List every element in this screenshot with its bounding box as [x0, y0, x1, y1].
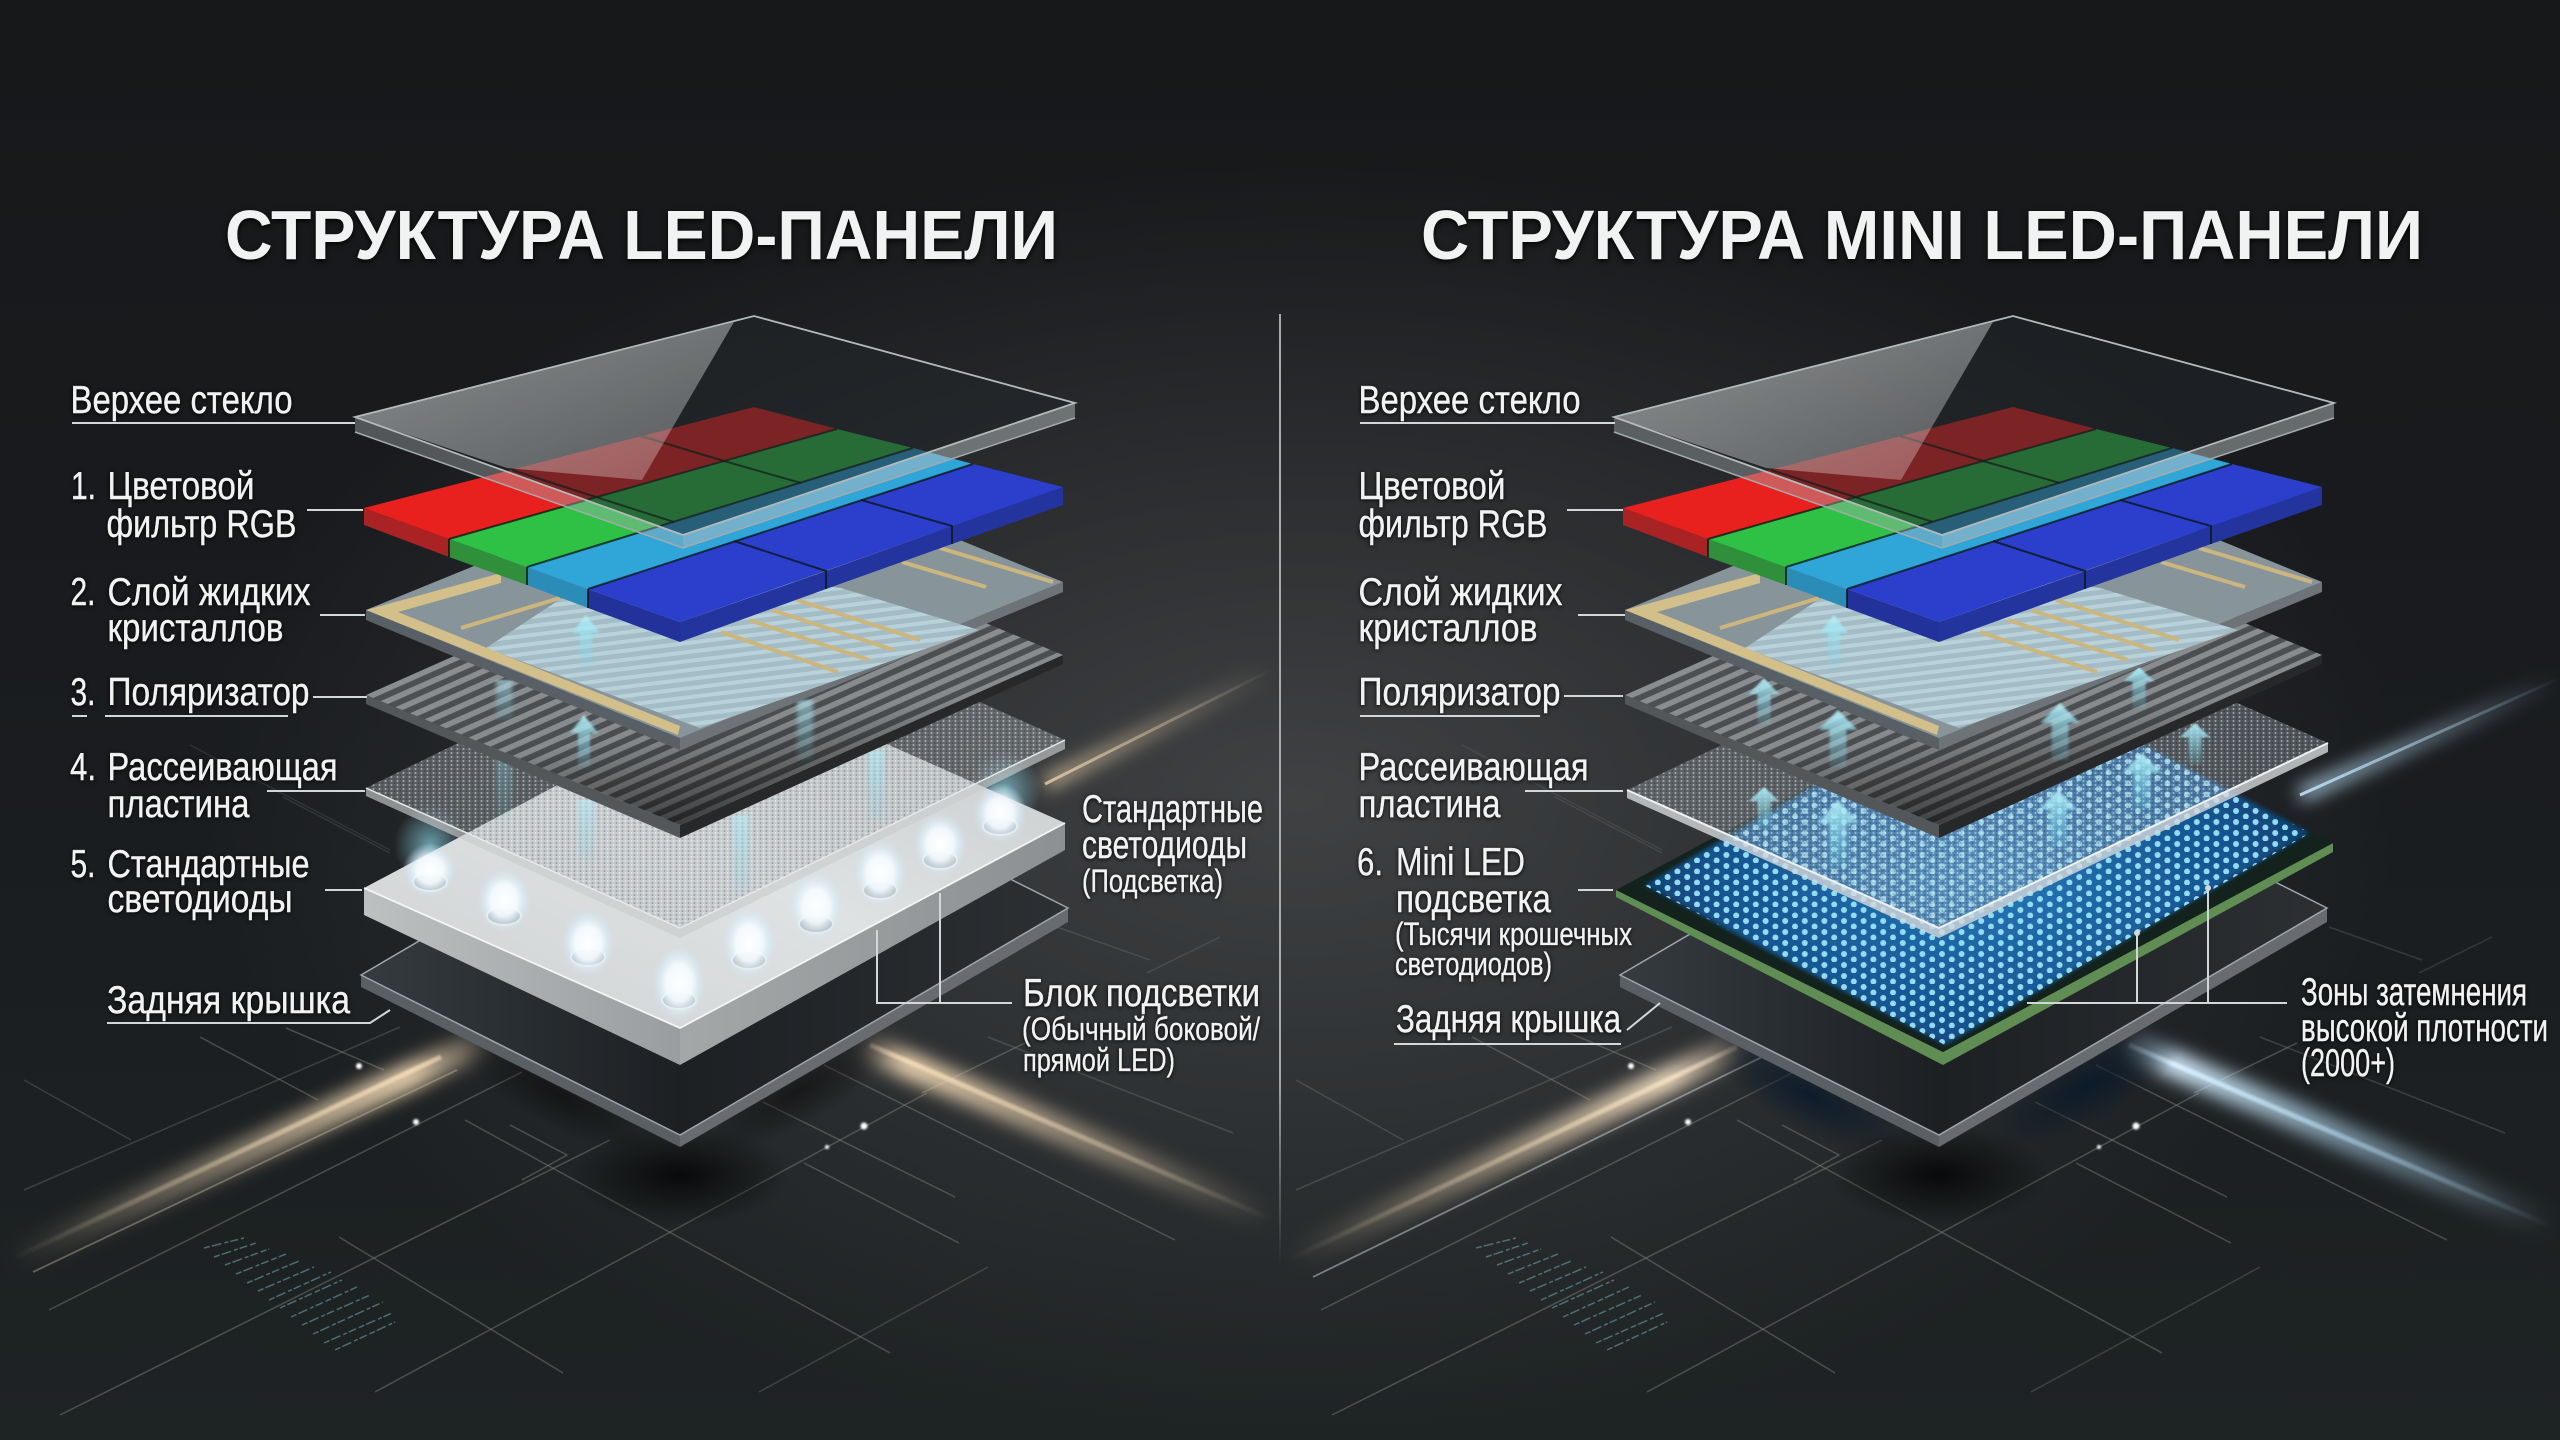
layer: polarizer: [366, 525, 1063, 838]
label: polarizer: 3.: [70, 671, 96, 714]
label: dimming zones: [2301, 971, 2548, 1085]
label: liquid crystal layer: кристаллов: [108, 607, 284, 650]
connector: backlight unit: [877, 893, 1012, 1003]
label: backlight unit: [1022, 972, 1260, 1078]
layer: top glass: [355, 316, 1075, 548]
layer: RGB colour filter: [364, 407, 1063, 642]
light arrows middle: [496, 680, 813, 767]
label: colour filter: Цветовой: [108, 465, 254, 508]
label: backlight unit: прямой LED): [1023, 1042, 1175, 1078]
label: backlight LEDs: светодиоды: [1082, 824, 1247, 867]
layer: standard LED block: [364, 683, 1065, 1065]
light streaks left: [8, 669, 1273, 1272]
label: standard LEDs: 5.: [70, 843, 96, 886]
label: polarizer: Поляризатор: [108, 671, 310, 714]
label: colour filter: фильтр RGB: [1358, 503, 1548, 546]
label: backlight LEDs: [1082, 788, 1263, 899]
label: backlight unit: Блок подсветки: [1023, 972, 1260, 1015]
light streaks right: [1288, 678, 2560, 1277]
navy halos under stack: [1696, 999, 2203, 1177]
label: liquid crystal layer: 2.: [70, 571, 96, 614]
label: mini LED backlight: светодиодов): [1395, 946, 1552, 982]
label: colour filter: [1358, 465, 1623, 546]
label: colour filter: 1.: [71, 465, 96, 508]
label: liquid crystal layer: кристаллов: [1358, 607, 1538, 650]
label: mini LED backlight: 6.: [1357, 841, 1383, 884]
light arrow top: [572, 615, 600, 667]
label: top glass: Верхее стекло: [1358, 379, 1580, 422]
background grid lines left: [24, 745, 1233, 1415]
label: backlight LEDs: Стандартные: [1082, 788, 1263, 831]
layer: liquid crystal: [1625, 454, 2322, 750]
shadow halos under stack: [447, 1006, 912, 1175]
layer: back cover: [1620, 748, 2327, 1225]
label: standard LEDs: Стандартные: [108, 843, 310, 886]
layer: back cover: [361, 748, 1068, 1225]
light arrows lower: [496, 680, 884, 893]
light arrows lower: [1749, 723, 2210, 868]
label: back cover: Задняя крышка: [107, 979, 350, 1022]
title: LED panel: СТРУКТУРА LED-ПАНЕЛИ: [225, 196, 1058, 274]
light arrow top: [1820, 615, 1848, 667]
divider: [1279, 314, 1281, 1264]
label: liquid crystal layer: [1358, 571, 1625, 650]
label: backlight LEDs: (Подсветка): [1082, 863, 1223, 899]
label: diffuser: Рассеивающая: [108, 746, 338, 789]
label: backlight unit: (Обычный боковой/: [1022, 1011, 1260, 1047]
layer: mini LED board: [1616, 673, 2333, 1065]
label: back cover: Задняя крышка: [1396, 998, 1621, 1041]
label: liquid crystal layer: [70, 571, 365, 650]
label: standard LEDs: светодиоды: [108, 878, 292, 921]
layer: diffuser plate: [1627, 605, 2328, 938]
label: colour filter: Цветовой: [1358, 465, 1506, 508]
light arrows middle: [1749, 667, 2154, 767]
label: diffuser: пластина: [1358, 783, 1501, 826]
label: diffuser: 4.: [70, 746, 96, 789]
label: diffuser: [1358, 746, 1623, 826]
label: polarizer: Поляризатор: [1358, 671, 1560, 714]
label: mini LED backlight: [1357, 841, 1632, 982]
label: colour filter: фильтр RGB: [106, 503, 296, 546]
label: standard LEDs: [70, 843, 362, 921]
title: Mini LED panel: СТРУКТУРА MINI LED-ПАНЕЛИ: [1421, 196, 2423, 274]
label: mini LED backlight: подсветка: [1396, 878, 1551, 921]
standard LEDs: [403, 783, 1027, 1021]
layer: liquid crystal: [366, 454, 1063, 750]
panel: Mini LED structure: [1357, 196, 2548, 1225]
mini LED dots: [1644, 673, 2310, 1045]
layer: polarizer: [1625, 525, 2322, 838]
label: liquid crystal layer: Слой жидких: [1358, 571, 1563, 614]
label: top glass: Верхее стекло: [70, 379, 292, 422]
label: dimming zones: (2000+): [2301, 1042, 2395, 1085]
label: liquid crystal layer: Слой жидких: [108, 571, 311, 614]
label: diffuser: [70, 746, 365, 826]
connector: dimming zones: [2027, 885, 2287, 1003]
label: mini LED backlight: (Тысячи крошечных: [1395, 916, 1632, 952]
label: diffuser: пластина: [108, 783, 250, 826]
label: diffuser: Рассеивающая: [1358, 746, 1588, 789]
background grid lines right: [1296, 745, 2505, 1415]
layer: RGB colour filter: [1623, 407, 2322, 642]
label: colour filter: [71, 465, 363, 546]
layer: top glass: [1614, 316, 2334, 548]
label: mini LED backlight: Mini LED: [1396, 841, 1525, 884]
layer: diffuser plate: [366, 600, 1065, 938]
panel: LED structure: [70, 196, 1263, 1225]
